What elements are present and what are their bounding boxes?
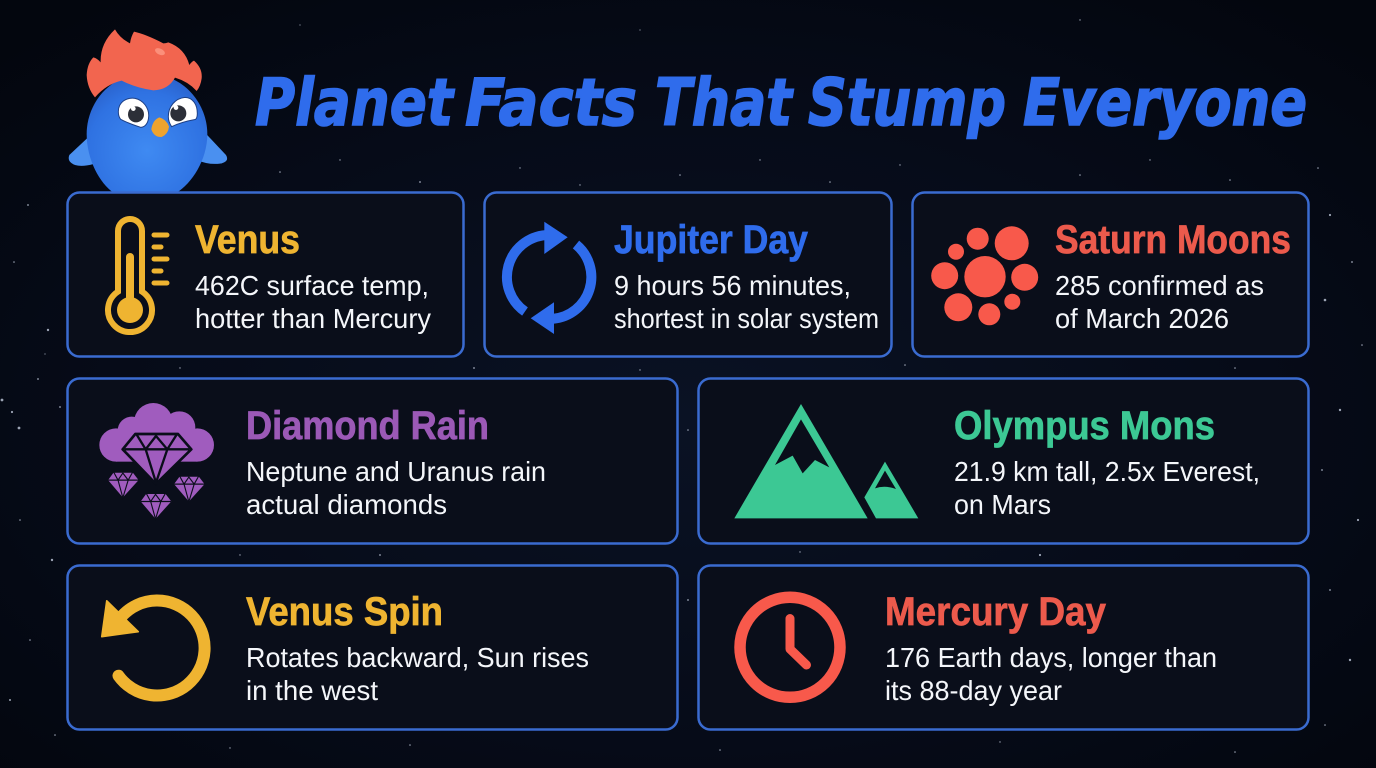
description: its 88-day year xyxy=(885,675,1062,706)
description: 9 hours 56 minutes, xyxy=(614,270,851,301)
description xyxy=(954,456,1260,520)
description: 176 Earth days, longer than xyxy=(885,642,1217,673)
description: Rotates backward, Sun rises xyxy=(246,642,589,673)
description: 462C surface temp, xyxy=(195,270,429,301)
title: Stump xyxy=(808,66,1006,141)
description: 21.9 km tall, 2.5x Everest, xyxy=(954,456,1260,487)
left eye xyxy=(118,98,149,127)
panel: Venus Spin xyxy=(68,566,678,730)
description: hotter than Mercury xyxy=(195,303,431,334)
title xyxy=(255,66,1307,141)
heading: Olympus Mons xyxy=(954,404,1215,448)
title: Planet xyxy=(255,66,455,141)
description: Neptune and Uranus rain xyxy=(246,456,546,487)
heading: Venus Spin xyxy=(246,590,443,634)
icon: thermometer xyxy=(108,219,167,332)
heading: Mercury Day xyxy=(885,590,1107,634)
icon: clock xyxy=(740,597,840,697)
panel: Saturn Moons xyxy=(912,192,1308,356)
heading: Diamond Rain xyxy=(246,404,489,448)
description xyxy=(614,270,879,334)
description: 285 confirmed as xyxy=(1055,270,1264,301)
description: in the west xyxy=(246,675,378,706)
body xyxy=(87,73,207,193)
heading: Saturn Moons xyxy=(1055,218,1291,262)
mascot: blue bird with red hair xyxy=(69,29,227,193)
icon: cloud raining diamonds xyxy=(99,403,214,520)
hair xyxy=(87,29,202,97)
icon: mountains xyxy=(734,404,918,518)
panel: Mercury Day xyxy=(698,566,1308,730)
icon: counter-clockwise arrow xyxy=(102,601,205,696)
panel: Diamond Rain xyxy=(68,378,678,544)
wings xyxy=(69,129,227,166)
description: actual diamonds xyxy=(246,489,447,520)
heading: Jupiter Day xyxy=(614,218,809,262)
description xyxy=(1055,270,1264,334)
title: Everyone xyxy=(1023,66,1307,141)
description xyxy=(885,642,1217,706)
panel: Jupiter Day xyxy=(484,192,892,356)
icon: moon cluster xyxy=(931,226,1038,325)
description: on Mars xyxy=(954,489,1051,520)
panel: Olympus Mons xyxy=(698,378,1308,544)
heading: Venus xyxy=(195,218,300,262)
description: shortest in solar system xyxy=(614,303,879,334)
panel: Venus xyxy=(68,192,464,356)
title: That xyxy=(655,66,794,141)
right eye xyxy=(168,97,197,127)
beak xyxy=(151,117,169,137)
description xyxy=(246,456,546,520)
description: of March 2026 xyxy=(1055,303,1229,334)
icon: cycle arrows xyxy=(507,222,591,334)
description xyxy=(195,270,431,334)
title: Facts xyxy=(465,66,637,141)
description xyxy=(246,642,589,706)
